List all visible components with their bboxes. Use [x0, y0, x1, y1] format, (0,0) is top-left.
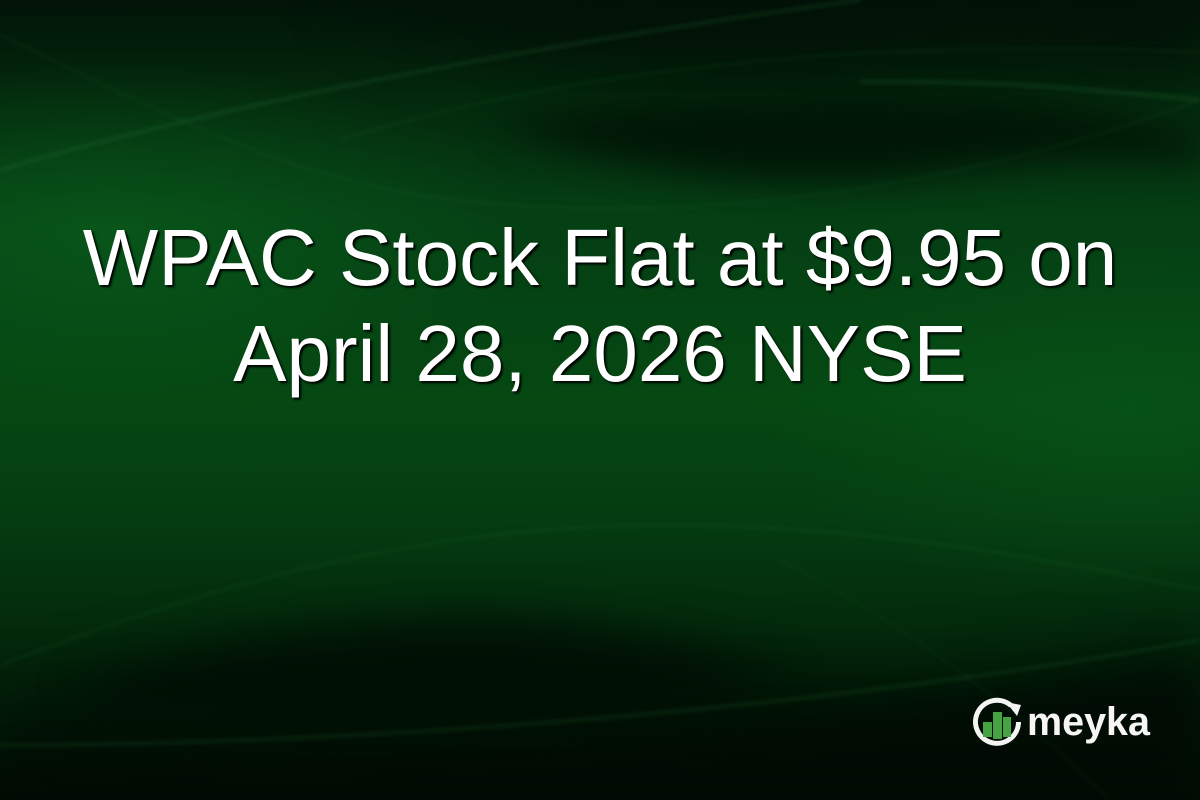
logo: meyka: [973, 698, 1151, 746]
wordmark: meyka: [1027, 700, 1151, 744]
icon: circular arrow with bars: [976, 700, 1021, 743]
top dark band: [320, 0, 1200, 70]
title: WPAC Stock Flat at $9.95 on: [83, 213, 1117, 302]
title: April 28, 2026 NYSE: [233, 309, 967, 398]
bottom dark band: [0, 620, 1200, 800]
title: [83, 213, 1117, 401]
